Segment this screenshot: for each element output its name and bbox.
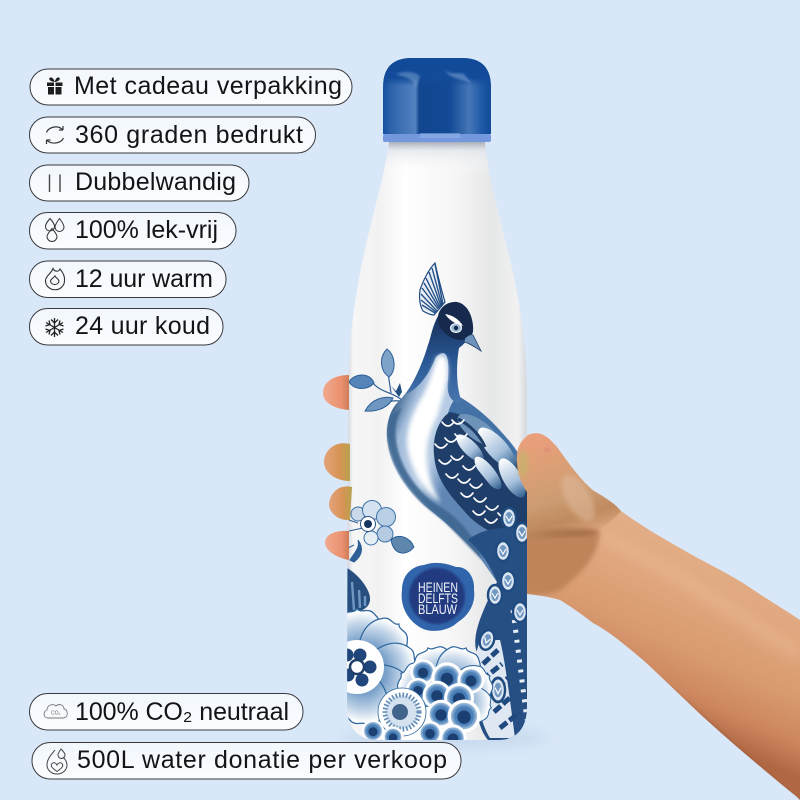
peacock body xyxy=(387,303,527,582)
feature: gift wrapping: Met cadeau verpakking xyxy=(74,72,342,100)
feature: CO2 neutral xyxy=(30,694,303,730)
icon: CO2 cloud: CO₂ xyxy=(51,710,60,716)
icon: double wall xyxy=(50,174,60,192)
feature: CO2 neutral: 100% CO₂ neutraal xyxy=(75,698,289,726)
feature: 360 degrees printed xyxy=(30,117,316,153)
thumb xyxy=(517,433,621,540)
feature: 360 degrees printed: 360 graden bedrukt xyxy=(75,121,303,149)
wax seal logo: HEINEN xyxy=(418,579,458,595)
icon: snowflake xyxy=(46,318,64,337)
peacock head xyxy=(438,302,481,351)
bottle body xyxy=(347,142,527,740)
second flower xyxy=(397,646,494,740)
bottle cap xyxy=(383,58,491,142)
icon: CO2 cloud xyxy=(44,705,67,718)
dark leaf xyxy=(347,568,370,614)
fan flower xyxy=(362,688,426,740)
feature: 24 hours cold xyxy=(30,308,223,345)
finger 3 xyxy=(329,486,352,520)
icon: water drop with heart xyxy=(47,749,67,774)
feature: leak free: 100% lek-vrij xyxy=(75,216,218,244)
crest xyxy=(420,263,445,315)
finger 4 xyxy=(325,531,349,560)
peacock neck xyxy=(406,316,465,401)
small flower xyxy=(348,500,414,562)
peacock tail xyxy=(468,508,529,740)
arm xyxy=(515,433,800,800)
feature: water donation: 500L water donatie per verkoop xyxy=(77,746,447,774)
bottle shadow xyxy=(340,728,550,748)
icon: flame xyxy=(45,268,65,290)
finger 2 xyxy=(324,443,350,481)
feature: 24 hours cold: 24 uur koud xyxy=(75,312,210,340)
icon: drops xyxy=(46,218,64,242)
peacock xyxy=(387,263,531,740)
peacock shoulder xyxy=(448,397,517,462)
branch with leaves xyxy=(349,349,402,411)
feature: gift wrapping xyxy=(30,69,352,105)
feature: leak free xyxy=(30,212,236,249)
bottle artwork xyxy=(347,262,527,740)
icon: rotate arrows xyxy=(46,126,64,144)
bottle xyxy=(347,58,527,740)
feature: double walled: Dubbelwandig xyxy=(75,168,236,196)
wax seal logo: BLAUW xyxy=(418,601,458,617)
feature: water donation xyxy=(32,742,461,779)
icon: gift xyxy=(47,77,62,94)
peacock wing xyxy=(434,412,527,530)
fingers xyxy=(323,375,352,560)
finger 1 xyxy=(323,375,349,410)
white breast xyxy=(407,356,448,503)
feature: double walled xyxy=(30,165,249,201)
feature: 12 hours warm: 12 uur warm xyxy=(75,265,213,293)
feature: 12 hours warm xyxy=(30,261,226,298)
wax seal logo xyxy=(402,563,474,631)
wax seal logo: DELFTS xyxy=(418,590,458,606)
neck shading xyxy=(387,142,486,160)
large flower xyxy=(347,608,415,724)
